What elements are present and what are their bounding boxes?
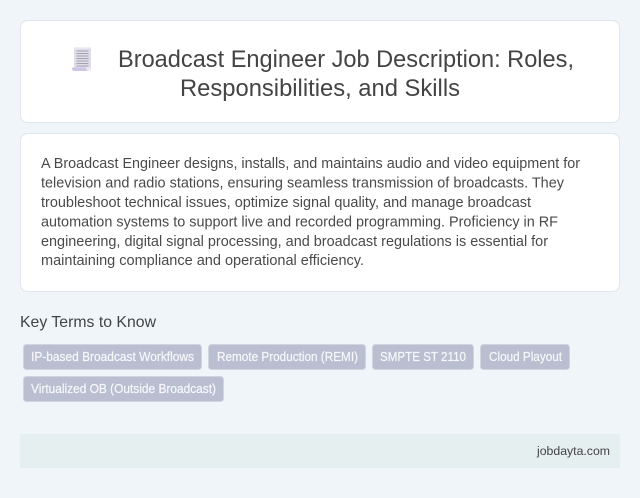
tag: Cloud Playout: [480, 344, 570, 370]
text block: description: maintaining compliance and operational efficiency.: [41, 253, 364, 269]
text block: description: troubleshoot technical issues, optimize signal quality, and manage broadcast: [41, 195, 531, 211]
heading: key terms: Key Terms to Know: [20, 314, 156, 331]
tag: Virtualized OB: Virtualized OB (Outside Broadcast): [31, 381, 216, 396]
tag: IP-based Broadcast Workflows: [24, 344, 202, 370]
tag: Remote Production (REMI): [208, 344, 366, 370]
text block: description: television and radio stations, ensuring seamless transmission of broadcasts. They: [41, 175, 565, 191]
footer source text: jobdayta.com: [536, 444, 610, 458]
tag list: key terms: [24, 344, 570, 402]
panel: title card: [20, 20, 620, 122]
text block: description: [41, 156, 580, 269]
tag: SMPTE ST 2110: SMPTE ST 2110: [380, 349, 466, 364]
title: [118, 46, 574, 102]
tag: Virtualized OB: [24, 376, 224, 402]
tag: IP-based Broadcast Workflows: IP-based Broadcast Workflows: [31, 349, 194, 364]
title: Broadcast Engineer Job Description: Roles,: [118, 46, 574, 73]
tag: Remote Production (REMI): Remote Production (REMI): [217, 349, 358, 364]
footer bar: [20, 434, 620, 468]
text block: description: A Broadcast Engineer designs, installs, and maintains audio and video equipment for: [41, 156, 580, 172]
icon: document scroll: [72, 47, 91, 71]
title: Responsibilities, and Skills: [180, 75, 460, 102]
text block: description: automation systems to support live and recorded programming. Proficiency in RF: [41, 214, 558, 230]
text block: description: engineering, digital signal processing, and broadcast regulations is essential for: [41, 234, 548, 250]
tag: SMPTE ST 2110: [372, 344, 474, 370]
tag: Cloud Playout: Cloud Playout: [489, 349, 562, 364]
panel: description card: [20, 134, 620, 292]
